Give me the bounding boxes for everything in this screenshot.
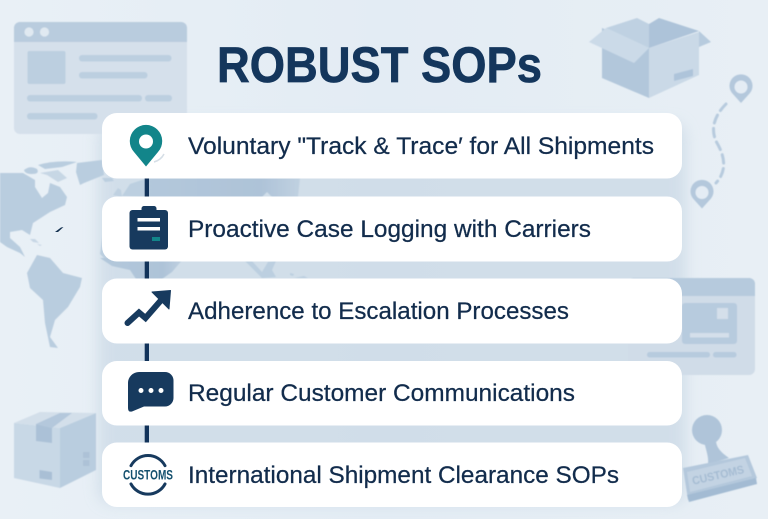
panel: escalation processes: Adherence to Escalation Processes bbox=[188, 298, 569, 325]
icon: location pin bbox=[130, 125, 164, 166]
panel: international clearance bbox=[102, 442, 682, 507]
background icon: open box top right bbox=[589, 18, 711, 98]
background: world map bbox=[0, 160, 308, 348]
timeline connector bbox=[145, 176, 149, 444]
background icon: closed box bottom left bbox=[14, 412, 96, 488]
icon: trending arrow bbox=[128, 290, 170, 323]
icon: customs badge: CUSTOMS bbox=[123, 468, 173, 482]
map mark bbox=[55, 227, 64, 232]
panel: proactive case logging: Proactive Case Logging with Carriers bbox=[188, 216, 591, 243]
panel: track and trace: Voluntary "Track & Trace′ for All Shipments bbox=[188, 133, 654, 160]
panel: proactive case logging bbox=[102, 196, 682, 262]
background icon: customs stamp: CUSTOMS bbox=[691, 464, 746, 488]
icon: chat bubble bbox=[128, 372, 174, 412]
panel: escalation processes bbox=[102, 278, 682, 344]
background icon: route with two location pins bbox=[690, 74, 752, 208]
icon: customs badge bbox=[123, 456, 173, 494]
title: ROBUST SOPs bbox=[217, 36, 542, 93]
background icon: customs stamp bbox=[683, 415, 757, 502]
background icon: browser window top left bbox=[14, 22, 187, 134]
panel: customer communications bbox=[102, 361, 682, 426]
icon: clipboard bbox=[130, 206, 168, 250]
panel: international clearance: International Shipment Clearance SOPs bbox=[188, 462, 619, 489]
panel: customer communications: Regular Customer Communications bbox=[188, 380, 575, 407]
panel: track and trace bbox=[102, 113, 682, 178]
background icon: browser window right bbox=[628, 278, 755, 375]
